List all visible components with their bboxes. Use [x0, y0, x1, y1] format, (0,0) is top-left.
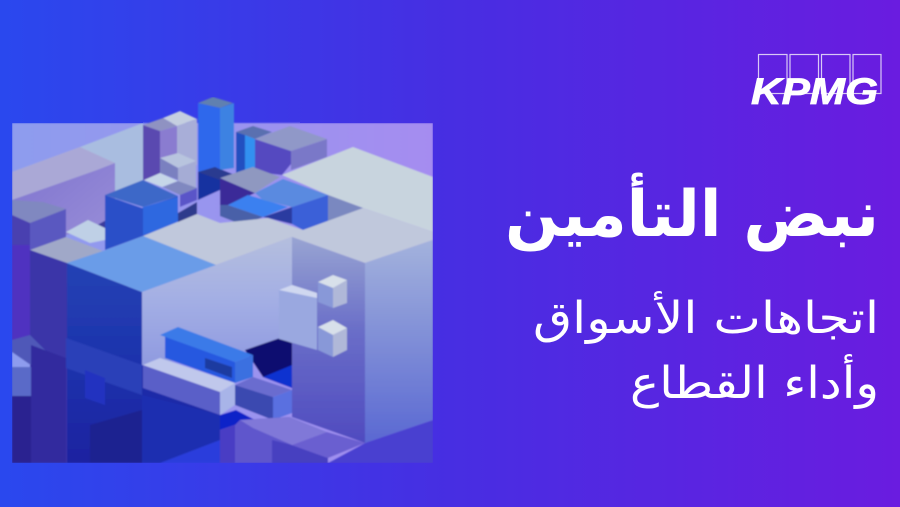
title: نبض التأمين [505, 172, 879, 252]
illustration: isometric blocks [12, 97, 433, 463]
KPMG logo [751, 54, 881, 112]
subtitle line 1: اتجاهات الأسواق [533, 290, 879, 344]
logo boxes [758, 54, 881, 94]
subtitle line 2: وأداء القطاع [630, 354, 879, 409]
logo wordmark: KPMG [751, 71, 878, 112]
